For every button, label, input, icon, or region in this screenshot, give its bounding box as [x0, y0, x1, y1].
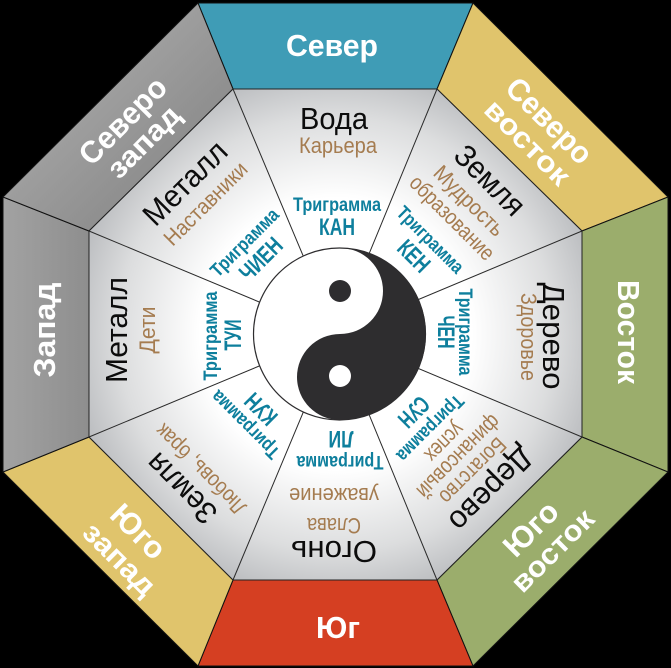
sector: northeast, earth: образование	[405, 170, 500, 265]
sector: north, water: Вода	[300, 101, 369, 136]
sector: southwest, earth: Любовь, брак	[150, 419, 251, 520]
sector: east, wood: Здоровье	[516, 293, 541, 381]
sector: southeast, wood	[366, 364, 542, 540]
sector: east, wood: ЧЕН	[432, 316, 459, 348]
sector: south, fire: Триграмма	[296, 451, 384, 472]
panel: southwest: запад	[76, 516, 162, 603]
sector: northeast, earth	[365, 129, 541, 305]
sector: northwest, metal: Металл	[136, 134, 235, 233]
panel: north: Север	[286, 28, 378, 63]
panel: southeast	[437, 437, 668, 666]
sector: west, metal: Металл	[99, 277, 134, 383]
sector: southwest, earth: Триграмма	[207, 385, 284, 463]
panel: northwest: Северо	[72, 70, 174, 172]
icon: yin yang	[254, 248, 426, 420]
sector: southwest, earth	[127, 357, 313, 543]
panel: east	[582, 197, 668, 472]
panel: northwest: запад	[101, 99, 188, 186]
sector: north, water: Триграмма	[293, 195, 381, 216]
sector spokes	[89, 89, 582, 580]
sector: southeast, wood: Дерево	[442, 440, 541, 539]
sector: north, water: Карьера	[299, 133, 378, 158]
sector: southwest, earth: Земля	[139, 446, 224, 531]
panel: northeast	[437, 3, 668, 231]
sector: northwest, metal: ЧИЕН	[234, 232, 289, 287]
sector: south, fire	[289, 425, 384, 569]
sector: south, fire: Слава	[306, 513, 361, 538]
sector: south, fire: Огонь	[291, 534, 377, 569]
sector: west, metal: Триграмма	[201, 291, 222, 380]
panel: east: Восток	[611, 280, 646, 384]
sector: west, metal: Дети	[135, 306, 160, 354]
panel: south: Юг	[316, 610, 360, 645]
panel: northwest	[3, 3, 233, 231]
panel: west: Запад	[27, 282, 62, 378]
panel: north	[198, 3, 473, 89]
panel: south	[198, 580, 473, 666]
sector: east, wood	[432, 282, 571, 390]
sector: south, fire: уважение	[289, 483, 379, 508]
panel: west	[3, 197, 89, 472]
sector: southeast, wood: успех	[419, 417, 470, 468]
sector: northeast, earth: КЕН	[392, 235, 435, 278]
sector: northeast, earth: Земля	[447, 137, 533, 223]
sector: west, metal: ТУИ	[220, 320, 247, 350]
panel: northeast: Северо	[499, 70, 600, 171]
sector: southeast, wood: Богатство	[434, 432, 511, 509]
panel: southeast: Юго	[496, 494, 566, 564]
panel: northeast: восток	[477, 94, 577, 193]
sector: northwest, metal: Наставники	[159, 157, 253, 251]
inner octagon	[89, 89, 582, 580]
sector: northwest, metal: Триграмма	[207, 204, 284, 282]
sector: southeast, wood: финансовый	[412, 410, 506, 504]
sector: northeast, earth: Триграмма	[392, 202, 468, 278]
sector: north, water	[293, 101, 381, 241]
panel: southwest	[3, 437, 233, 666]
panel: southwest: Юго	[103, 497, 173, 567]
sector: northwest, metal	[134, 132, 309, 307]
sector: west, metal	[99, 277, 247, 383]
sector: southeast, wood: СУН	[392, 390, 435, 433]
sector: southwest, earth: КУН	[239, 387, 283, 431]
panel: southeast: восток	[505, 503, 602, 599]
sector: southeast, wood: Триграмма	[392, 390, 468, 466]
sector: northeast, earth: Мудрость	[429, 160, 510, 241]
sector: south, fire: ЛИ	[328, 425, 354, 452]
sector: north, water: КАН	[319, 214, 355, 241]
sector: east, wood: Дерево	[536, 282, 571, 390]
sector: east, wood: Триграмма	[454, 288, 475, 376]
